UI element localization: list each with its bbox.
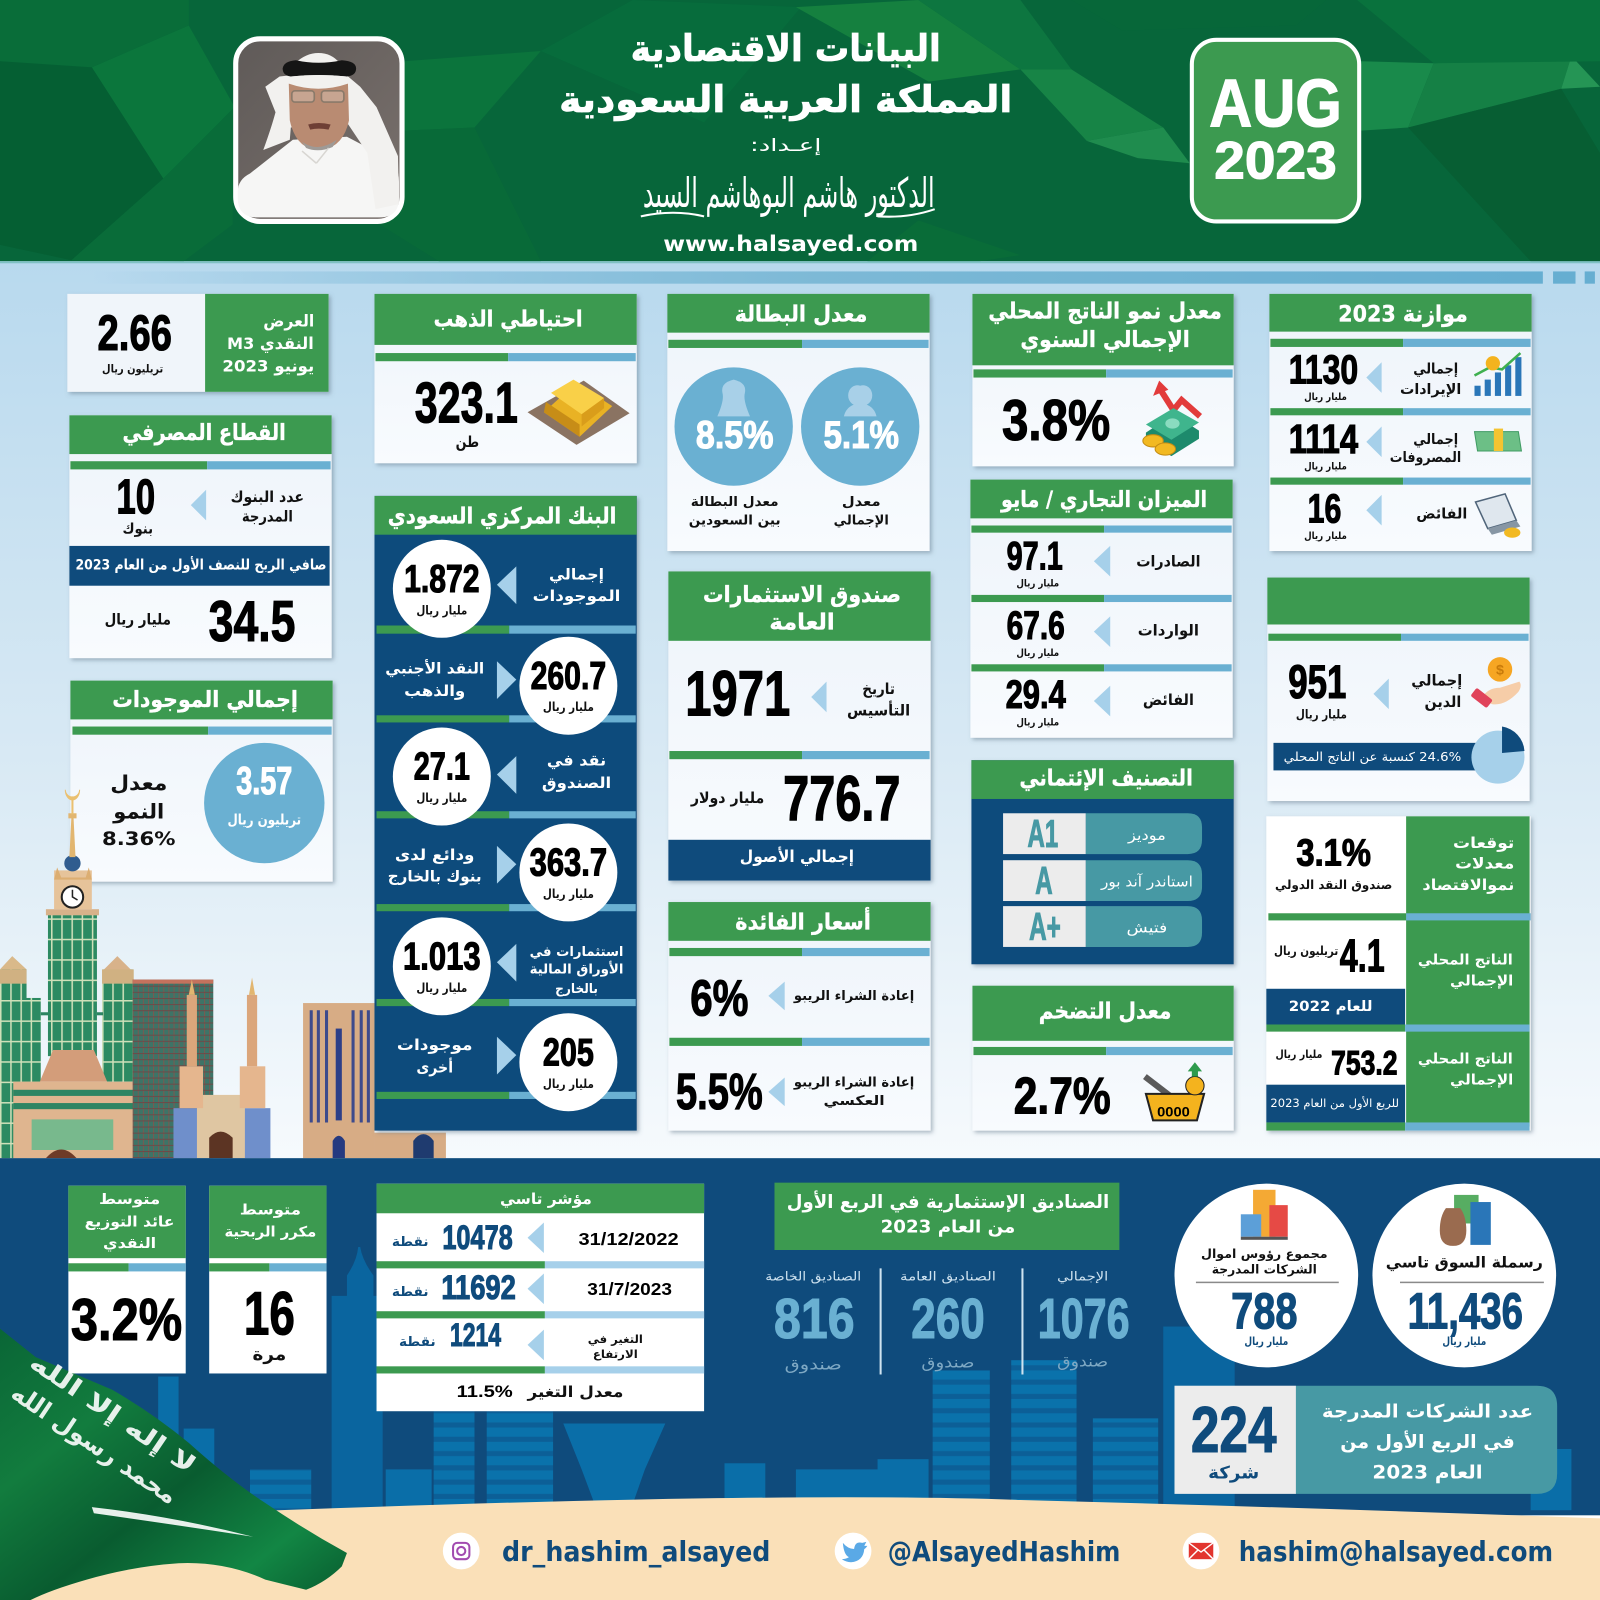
panel: GDP forecasts [1266,816,1531,1131]
skyline: Makkah clock tower and buildings [0,790,446,1158]
panel: trade balance: الصادرات [1136,552,1201,570]
panel: interest rates: 5.5% [676,1063,763,1120]
author signature [641,169,935,217]
panel: unemployment: بين السعودين [689,513,781,528]
panel: Saudi central bank: 1.872 [404,558,480,601]
panel: TASI index: 11.5% [457,1383,513,1401]
panel: total assets: إجمالي الموجودات [112,687,298,713]
panel: GDP forecasts: مليار ريال [1276,1048,1322,1061]
panel: credit rating: A+ [1029,906,1061,949]
panel: GDP forecasts: الإجمالي [1450,1073,1513,1089]
panel: public investment fund: العامة [769,610,835,636]
panel: credit rating: A1 [1028,813,1058,856]
panel: budget 2023: مليار ريال [1304,531,1347,542]
panel: M3 money supply: العرض [263,312,314,331]
panel: TASI index: معدل التغير [526,1383,623,1401]
panel: GDP forecasts: توقعات [1453,834,1514,852]
panel: interest rates: إعادة الشراء الريبو [793,989,914,1004]
panel: GDP growth [972,294,1234,466]
circle: listed companies capital: مليار ريال [1244,1335,1288,1348]
panel: average P/E: متوسط [240,1202,301,1218]
panel: TASI index [377,1184,704,1411]
portrait [236,39,402,221]
panel: Saudi central bank: استثمارات في [530,945,623,960]
date badge: 2023 [1214,132,1337,191]
panel: banking sector: المدرجة [242,507,293,525]
panel: number of listed companies: عدد الشركات المدرجة [1322,1401,1533,1422]
panel: public investment fund [668,571,931,881]
panel: M3 money supply [67,294,329,392]
flag of Saudi Arabia: محمد رسول الله [6,1378,183,1510]
panel: investment funds: الصناديق الإستثمارية في الربع الأول [787,1190,1109,1213]
blue city skyline [158,1247,1571,1510]
circle: market capitalisation: رسملة السوق تاسي [1386,1253,1543,1272]
panel: TASI index: 31/7/2023 [587,1279,672,1299]
panel: Saudi central bank: مليار ريال [416,981,467,995]
panel: public investment fund: صندوق الاستثمارات [703,582,901,608]
footer background [0,1497,1600,1600]
panel: GDP forecasts: 753.2 [1331,1044,1397,1082]
panel: inflation [972,986,1234,1131]
prepared by label: إعـداد: [750,136,821,156]
panel: Saudi central bank: 260.7 [531,655,606,698]
panel: investment funds: من العام 2023 [881,1218,1015,1238]
circle: market capitalisation: 11,436 [1408,1283,1523,1340]
panel: banking sector: 34.5 [209,590,295,654]
panel: budget 2023 [1269,294,1532,551]
panel: credit rating: فتيش [1127,921,1167,937]
circle: listed companies capital: مجموع رؤوس اموال [1201,1247,1328,1261]
panel: trade balance: مليار ريال [1016,718,1059,729]
panel: Saudi central bank: أخرى [416,1057,453,1076]
panel: Saudi central bank: 363.7 [530,842,607,885]
panel: Saudi central bank: 27.1 [414,746,470,789]
panel: interest rates: 6% [690,969,748,1026]
author signature: الدكتور هاشم البوهاشم السيد [643,169,935,217]
panel: M3 money supply: يونيو 2023 [222,356,314,375]
panel: Saudi central bank: موجودات [397,1036,472,1054]
panel: Saudi central bank: نقد في [547,751,606,770]
panel: number of listed companies [1174,1386,1557,1494]
panel: TASI index: نقطة [392,1285,429,1300]
panel: unemployment: معدل البطالة [735,301,867,327]
panel: number of listed companies: العام 2023 [1372,1463,1483,1484]
panel: Saudi central bank: إجمالي [549,566,604,585]
panel: average P/E: مكرر الربحية [224,1225,316,1241]
panel: public investment fund: 1971 [685,657,790,729]
icon: basket: 0000 [1157,1104,1190,1120]
panel: Saudi central bank: والذهب [404,682,465,700]
panel: banking sector [69,415,332,658]
flag of Saudi Arabia [0,1329,347,1600]
panel: unemployment [667,294,930,551]
panel: Saudi central bank: مليار ريال [416,603,467,617]
icon: hand with coin: $ [1496,662,1504,678]
panel: number of listed companies: شركة [1208,1464,1259,1484]
chart: debt pie [1471,727,1524,784]
panel: TASI index: الارتفاع [593,1348,638,1361]
panel: interest rates: إعادة الشراء الريبو [793,1076,914,1091]
panel: budget 2023: 16 [1308,485,1341,531]
website: www.halsayed.com [663,232,918,257]
panel: public debt: مليار ريال [1296,707,1347,721]
panel: Saudi central bank: البنك المركزي السعودي [388,503,616,529]
panel: public debt: الدين [1424,693,1461,711]
panel: GDP growth: معدل نمو الناتج المحلي [988,298,1222,324]
panel: TASI index: مؤشر تاسي [500,1190,592,1209]
panel: Saudi central bank: مليار ريال [543,887,594,901]
panel: total assets: 8.36% [102,829,176,850]
panel: budget 2023: الفائض [1416,506,1467,522]
title: البيانات الاقتصادية [631,27,941,70]
panel: number of listed companies: 224 [1191,1393,1277,1466]
panel: GDP forecasts: معدلات [1455,854,1514,872]
panel: total assets: معدل [110,771,167,795]
panel: Saudi central bank: 1.013 [403,935,481,978]
panel: credit rating: التصنيف الإئتماني [1019,766,1193,792]
panel: dividend yield: متوسط [99,1192,160,1208]
panel: investment funds: 816 [774,1287,855,1350]
panel: credit rating [971,760,1234,964]
panel: trade balance: مليار ريال [1016,579,1059,590]
panel: inflation: 2.7% [1014,1067,1111,1125]
panel: gold reserves: طن [456,433,479,451]
panel: Saudi central bank [374,496,637,1131]
panel: investment funds: الصناديق الخاصة [765,1270,861,1285]
panel: dividend yield: النقدي [103,1236,156,1253]
panel: Saudi central bank: بالخارج [555,982,598,997]
panel: interest rates [668,902,931,1131]
panel: unemployment: 8.5% [696,414,773,457]
panel: budget 2023: الإيرادات [1400,382,1461,398]
panel: public investment fund: مليار دولار [690,789,764,807]
icon: laptop surplus [1476,494,1520,538]
panel: Saudi central bank: ودائع لدى [395,846,474,864]
panel: banking sector: عدد البنوك [231,488,304,506]
panel: trade balance: 97.1 [1007,534,1063,578]
panel: GDP forecasts: 4.1 [1340,929,1385,981]
panel: GDP growth: الإجمالي السنوي [1020,327,1190,353]
social: email: hashim@halsayed.com [1239,1536,1553,1568]
icon: woman [717,380,750,416]
icon: hand with coin [1470,657,1521,708]
panel: investment funds: صندوق [785,1355,842,1373]
panel: trade balance: 29.4 [1006,673,1066,717]
panel: GDP forecasts: الإجمالي [1450,974,1513,990]
page background [0,261,1600,1159]
panel: trade balance [970,480,1233,738]
panel: investment funds [765,1183,1130,1374]
panel: public investment fund: إجمالي الأصول [740,846,854,867]
panel: TASI index: 31/12/2022 [579,1229,679,1249]
flag of Saudi Arabia: لا إله إلا الله [24,1347,201,1480]
icon: basket [1145,1062,1204,1120]
panel: budget 2023: موازنة 2023 [1338,301,1468,327]
social: email [1183,1533,1553,1569]
panel: Saudi central bank: الصندوق [542,774,611,792]
panel: average P/E: مرة [253,1345,286,1365]
panel: banking sector: بنوك [122,522,153,538]
header banner [0,0,1600,261]
circle: market capitalisation: مليار ريال [1442,1335,1486,1348]
panel: Saudi central bank: بنوك بالخارج [388,868,482,886]
panel: GDP forecasts: للعام 2022 [1289,999,1372,1015]
icon: money and arrow [1143,381,1200,456]
panel: trade balance: مليار ريال [1016,648,1059,659]
panel: total assets: 3.57 [236,760,292,803]
panel: budget 2023: 1114 [1289,416,1358,462]
panel: average P/E [209,1186,327,1373]
panel: Saudi central bank: الموجودات [533,587,620,605]
panel: M3 money supply: النقدي M3 [227,334,314,354]
panel: GDP forecasts: الناتج المحلي [1418,952,1513,968]
panel: credit rating: موديز [1127,828,1166,844]
panel: TASI index: التغير في [588,1333,643,1346]
panel: public debt: إجمالي [1411,672,1462,691]
panel: public investment fund: التأسيس [847,700,910,719]
panel: investment funds: الصناديق العامة [900,1270,996,1285]
panel: Saudi central bank: 205 [543,1031,594,1074]
icon: colored buildings [1241,1190,1288,1240]
panel: interest rates: العكسي [823,1094,885,1109]
panel: Saudi central bank: مليار ريال [543,700,594,714]
panel: investment funds: صندوق [921,1353,974,1371]
title [559,27,1012,121]
panel: investment funds: 260 [911,1287,985,1350]
panel: budget 2023: إجمالي [1413,361,1458,377]
panel: M3 money supply: 2.66 [97,305,172,361]
panel: average P/E: 16 [244,1280,295,1348]
panel: inflation: معدل التضخم [1039,998,1171,1024]
panel: gold reserves: 323.1 [415,371,518,435]
panel: GDP forecasts: نموالاقتصاد [1422,876,1514,894]
panel: dividend yield [68,1186,186,1373]
panel: number of listed companies: في الربع الأول من [1340,1430,1515,1453]
panel: TASI index: 11692 [441,1269,516,1307]
circle: market capitalisation [1372,1184,1556,1367]
social: instagram: dr_hashim_alsayed [502,1536,770,1568]
panel: credit rating: A [1035,860,1053,903]
decorative band [0,261,1600,263]
panel: unemployment: معدل [842,495,881,510]
panel: public debt: 24.6% كنسبة عن الناتج المحلي [1284,750,1461,765]
circle: listed companies capital: 788 [1231,1283,1297,1340]
panel: Saudi central bank: النقد الأجنبي [385,658,484,678]
panel: trade balance: الواردات [1138,622,1199,640]
panel: total assets: تريليون ريال [228,812,301,828]
panel: investment funds: 1076 [1038,1287,1130,1350]
panel: investment funds: صندوق [1057,1352,1108,1370]
icon: gold bars [528,380,630,445]
panel: trade balance: الميزان التجاري / مايو [1000,487,1207,513]
panel: public investment fund: 776.7 [783,762,901,834]
panel: TASI index: نقطة [392,1235,429,1250]
panel: TASI index: 1214 [450,1316,501,1353]
icon: buildings and money bag [1440,1195,1491,1246]
panel: TASI index: 10478 [442,1219,513,1257]
panel: unemployment: الإجمالي [834,513,889,528]
date badge: AUG [1209,67,1342,142]
date badge [1192,40,1359,221]
panel: unemployment: معدل البطالة [691,495,779,510]
panel: gold reserves [374,294,637,463]
panel: public investment fund: تاريخ [862,680,895,698]
icon: revenue chart [1474,353,1521,396]
panel: investment funds: الإجمالي [1057,1270,1108,1284]
panel: GDP forecasts: الناتج المحلي [1418,1051,1513,1067]
panel: banking sector: القطاع المصرفي [122,420,286,446]
circle: listed companies capital [1174,1184,1358,1367]
icon: person [844,385,877,416]
circle: listed companies capital: الشركات المدرجة [1212,1262,1317,1276]
panel: Saudi central bank: مليار ريال [543,1077,594,1091]
social: twitter: @AlsayedHashim [888,1536,1120,1568]
panel: TASI index: نقطة [399,1335,436,1350]
panel: trade balance: الفائض [1143,691,1194,709]
panel: public debt: 951 [1288,656,1346,708]
panel: total assets: النمو [112,799,164,823]
panel: trade balance: 67.6 [1007,604,1065,648]
panel: unemployment: 5.1% [823,414,899,457]
panel: dividend yield: 3.2% [71,1286,182,1353]
panel: GDP forecasts: 3.1% [1296,831,1371,873]
panel: GDP forecasts: للربع الأول من العام 2023 [1270,1096,1399,1111]
panel: GDP growth: 3.8% [1002,389,1110,453]
panel: Saudi central bank: الأوراق المالية [530,960,623,977]
panel: interest rates: أسعار الفائدة [735,907,871,936]
panel: budget 2023: مليار ريال [1304,461,1347,472]
panel: GDP forecasts: تريليون ريال [1274,944,1338,958]
panel: public debt [1267,578,1530,801]
panel: total assets [70,681,333,882]
icon: cash [1474,429,1521,451]
panel: gold reserves: احتياطي الذهب [434,307,583,333]
panel: credit rating: استاندر آند بور [1100,873,1193,891]
panel: M3 money supply: تريليون ريال [102,362,163,375]
panel: budget 2023: المصروفات [1390,450,1461,466]
social: twitter [835,1533,1120,1569]
lower band background [0,1158,1600,1515]
panel: banking sector: مليار ريال [105,610,171,628]
panel: budget 2023: 1130 [1289,347,1358,393]
panel: budget 2023: إجمالي [1413,432,1458,448]
panel: banking sector: صافي الربح للنصف الأول من العام 2023 [76,555,327,573]
panel: dividend yield: عائد التوزيع [85,1215,174,1231]
panel: banking sector: 10 [116,470,155,524]
social: instagram [443,1533,770,1569]
panel: budget 2023: مليار ريال [1304,392,1347,403]
title: المملكة العربية السعودية [559,78,1012,121]
panel: GDP forecasts: صندوق النقد الدولي [1275,878,1392,892]
panel: Saudi central bank: مليار ريال [416,791,467,805]
